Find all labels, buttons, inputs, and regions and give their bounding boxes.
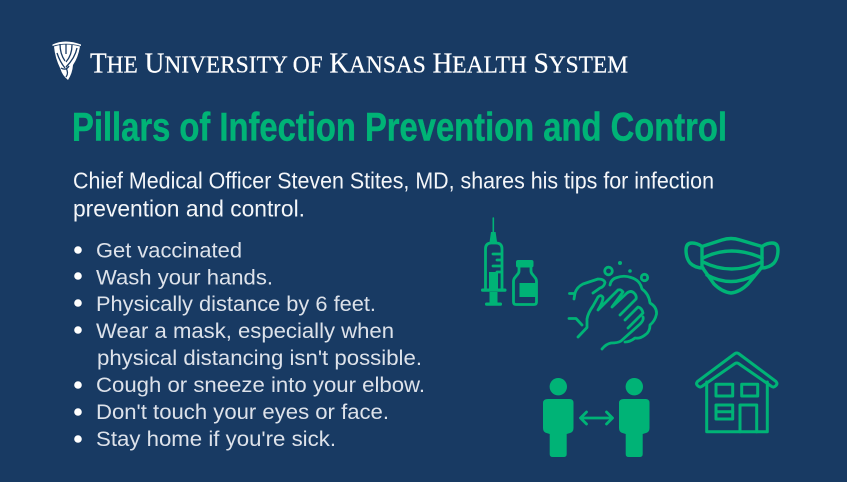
icon: two people distancing with arrow: [543, 378, 650, 457]
intro text: prevention and control.: [73, 196, 305, 222]
icon: house: [697, 353, 777, 432]
bullet list of tips: Stay home if you're sick.: [96, 428, 336, 451]
intro text: [73, 168, 714, 222]
icon: syringe and vial: [481, 218, 537, 306]
bullet list of tips: Get vaccinated: [96, 240, 242, 262]
bullet list of tips: Wash your hands.: [96, 266, 273, 290]
bullet list of tips: Don't touch your eyes or face.: [96, 401, 389, 424]
bullet list of tips: Cough or sneeze into your elbow.: [96, 374, 425, 397]
icon: washing hands: [569, 261, 657, 349]
intro text: Chief Medical Officer Steven Stites, MD, shares his tips for infection: [73, 168, 714, 194]
logo: university wheat mark: [52, 42, 81, 80]
bullet list of tips: Physically distance by 6 feet.: [96, 293, 376, 316]
bullet list of tips: physical distancing isn't possible.: [97, 347, 422, 370]
bullet list of tips: Wear a mask, especially when: [96, 320, 394, 343]
icon: face mask: [686, 238, 778, 293]
bullet list of tips: [74, 240, 425, 451]
logo: university name: THE UNIVERSITY OF KANSAS HEALTH SYSTEM: [90, 48, 628, 80]
